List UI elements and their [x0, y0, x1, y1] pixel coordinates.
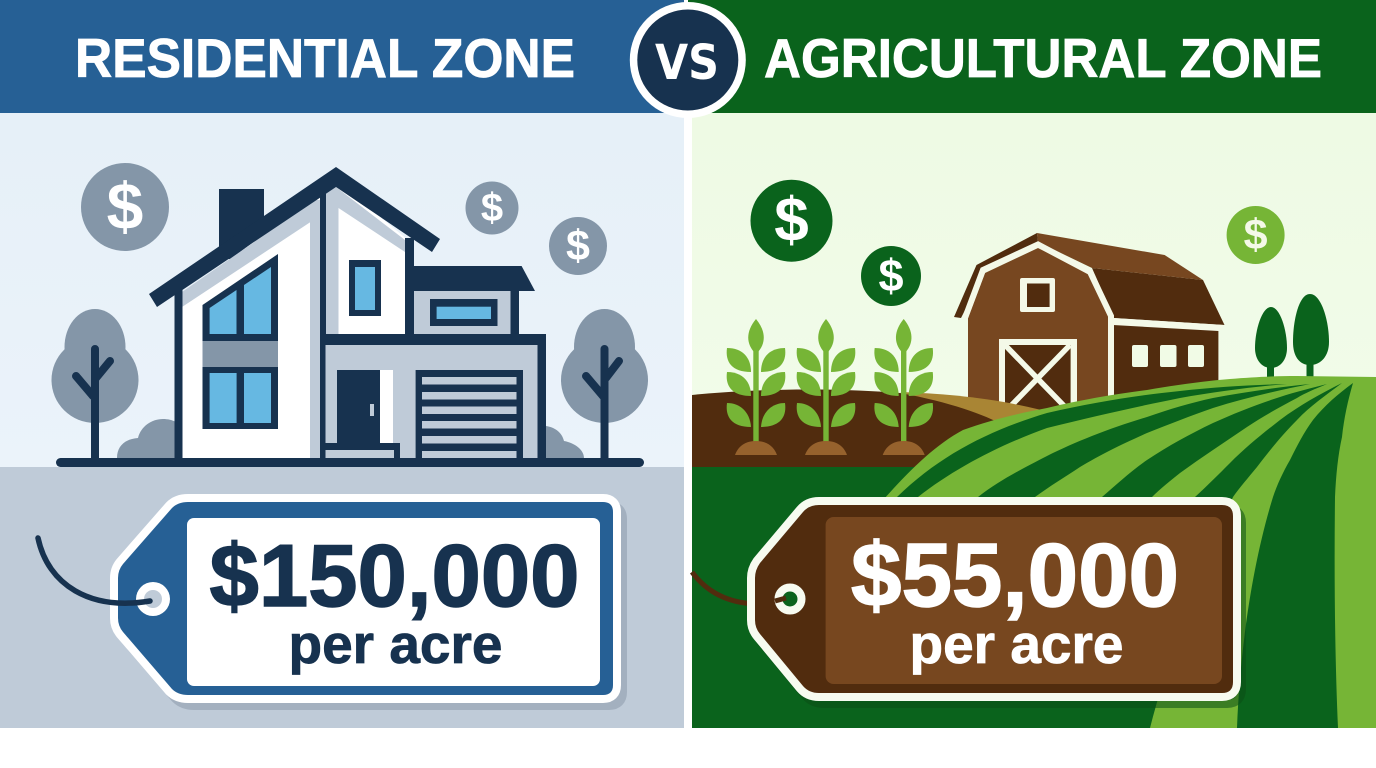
- icon: left tree: [52, 309, 138, 458]
- icon: coin large: $: [107, 169, 143, 243]
- upper small window: [349, 260, 381, 316]
- left band: [202, 341, 278, 367]
- stripe a: [897, 384, 1287, 497]
- tag hole: [778, 588, 802, 610]
- barn front: [968, 248, 1108, 410]
- icon: left bush: [117, 419, 176, 458]
- barn door: [999, 339, 1077, 412]
- panel: agricultural: [692, 113, 1376, 728]
- wall lines: [174, 290, 182, 458]
- icon: coin dark large: $: [774, 186, 809, 255]
- barn front trim: [965, 244, 1111, 400]
- panel: residential: [0, 113, 684, 728]
- icon: coin medium: [549, 217, 607, 275]
- door: [380, 370, 393, 443]
- icon: coin dark small: $: [878, 250, 904, 301]
- plant 3: [874, 319, 933, 455]
- barn side wall: [1113, 325, 1218, 395]
- icon: coin small: $: [481, 186, 503, 230]
- icon: house: [149, 167, 546, 458]
- price: $150,000: [210, 526, 580, 625]
- unit: per acre: [288, 613, 502, 675]
- plant 2: [797, 319, 855, 455]
- upper garage roof: [414, 266, 535, 291]
- stripe c: [1102, 384, 1327, 497]
- tree: tall: [1293, 294, 1329, 378]
- field: [880, 376, 1376, 728]
- price tag: agricultural: [692, 505, 1238, 700]
- ground line: [56, 458, 644, 467]
- hill: soil: [692, 389, 1003, 467]
- left windows lower: [202, 367, 278, 429]
- garage door: [416, 370, 523, 458]
- barn top roof: [1037, 233, 1203, 280]
- tag string: [38, 538, 150, 603]
- heading: residential zone: RESIDENTIAL ZONE: [75, 27, 575, 89]
- icon: coin medium: $: [566, 222, 590, 270]
- tag string: [692, 572, 756, 604]
- barn roof sliver: [954, 233, 1038, 318]
- price tag: residential: [38, 502, 619, 702]
- unit: per acre: [910, 613, 1124, 675]
- barn side roof: [1092, 268, 1224, 325]
- icon: coin large: [81, 163, 169, 251]
- header: residential: [0, 0, 684, 113]
- badge: vs: VS: [655, 35, 719, 91]
- hill: olive: [900, 392, 1060, 430]
- crops: [727, 319, 933, 455]
- lower storey: [326, 345, 538, 458]
- barn loft window: [1020, 278, 1055, 312]
- icon: coin small: [466, 182, 518, 234]
- tag hole: [136, 582, 170, 616]
- icon: coin dark large: [750, 180, 832, 262]
- plant 1: [727, 319, 785, 455]
- icon: coin dark small: [861, 246, 921, 306]
- barn side windows: [1132, 345, 1148, 367]
- roof underside: [182, 203, 310, 307]
- badge: vs: [630, 2, 746, 118]
- icon: right tree: [561, 309, 648, 458]
- price: $55,000: [851, 526, 1179, 626]
- stripe d and lower field: [880, 383, 1342, 728]
- walls: [176, 180, 546, 458]
- icon: right bush: [546, 426, 584, 458]
- left windows upper: [202, 254, 278, 341]
- heading: agricultural zone: AGRICULTURAL ZONE: [764, 27, 1322, 89]
- tree: short: [1255, 307, 1287, 378]
- upper garage window: [430, 299, 498, 326]
- stripe b: [978, 384, 1310, 497]
- chimney: [219, 189, 264, 259]
- main roof: [149, 167, 440, 307]
- icon: barn: [954, 233, 1224, 412]
- icon: coin light: $: [1244, 211, 1268, 259]
- barn eave: [1113, 318, 1224, 331]
- icon: coin light: [1227, 206, 1285, 264]
- header: agricultural: [688, 0, 1376, 113]
- upper garage box: [414, 291, 511, 334]
- stripe e: [1237, 383, 1353, 728]
